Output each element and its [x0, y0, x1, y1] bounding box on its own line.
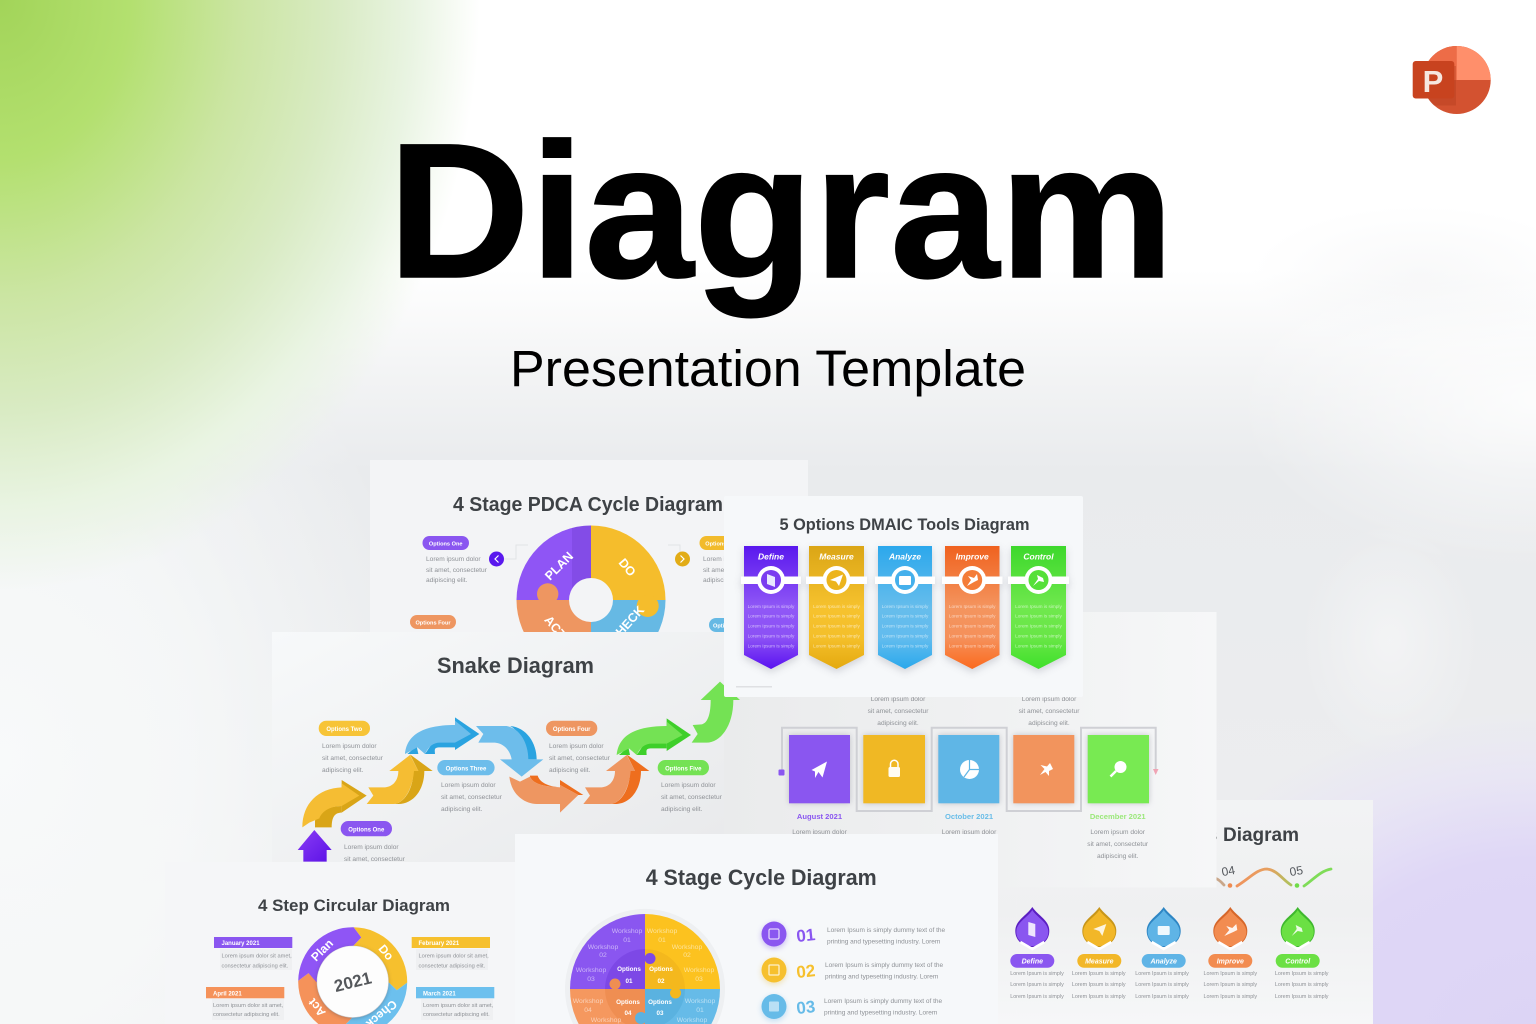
tile: September — [863, 696, 929, 803]
wheel labels: 02 — [599, 952, 607, 959]
list item 02: printing and typesetting industry. Lorem — [825, 974, 938, 980]
label: Options One: adipiscing elit. — [426, 577, 468, 584]
panel: 4 Step Circular Diagram — [165, 862, 517, 1024]
list item 03 — [762, 994, 943, 1019]
label: March 2021: March 2021 — [423, 992, 456, 998]
step: Define: Lorem Ipsum is simply — [1010, 994, 1064, 1000]
label: Options One: Lorem ipsum dolor — [344, 844, 399, 851]
PDCA puzzle wheel — [516, 526, 666, 674]
step: Control: Lorem Ipsum is simply — [1275, 994, 1329, 1000]
step: Improve: Lorem Ipsum is simply — [1203, 982, 1257, 988]
label: Options Three: Options Three — [446, 766, 487, 772]
list item 03: printing and typesetting industry. Lorem — [824, 1010, 937, 1016]
label: March 2021: consectetur adipiscing elit. — [423, 1012, 490, 1018]
banner: Analyze: Lorem Ipsum is simply — [882, 604, 929, 609]
step: Measure — [1072, 907, 1126, 1000]
panel: Snake Diagram — [272, 632, 740, 867]
connector line — [782, 728, 1156, 811]
wheel center labels: Options — [616, 999, 640, 1006]
heading: Snake: Snake Diagram — [437, 653, 594, 678]
banner: Analyze: Lorem Ipsum is simply — [882, 624, 929, 628]
label: Options Two: Lorem ipsum dolor — [322, 743, 377, 750]
label: March 2021 — [416, 987, 494, 1020]
banner: Measure: Measure — [819, 552, 854, 562]
tile: August 2021: Lorem ipsum dolor — [792, 829, 848, 836]
label: February 2021: consectetur adipiscing elit. — [418, 964, 486, 970]
icon: PowerPoint logo: P — [1423, 64, 1443, 99]
banner: Control: Lorem Ipsum is simply — [1015, 614, 1062, 618]
panel: 4 Stage PDCA Cycle Diagram — [370, 460, 808, 674]
footer mark — [736, 686, 772, 688]
label: Options Four: adipiscing elit. — [549, 767, 591, 774]
banner: Define: Lorem Ipsum is simply — [748, 644, 795, 648]
label: Options Two: sit amet, consectetur — [703, 567, 765, 574]
step: Define: Lorem Ipsum is simply — [1010, 982, 1064, 988]
heading: circular: 4 Step Circular Diagram — [258, 896, 450, 915]
tile: September: sit amet, consectetur — [868, 708, 929, 715]
label: Options Two: sit amet, consectetur — [322, 755, 384, 762]
label: April 2021 — [206, 987, 284, 1020]
start marker — [778, 770, 784, 776]
wheel center labels: 01 — [625, 978, 633, 985]
list item 01: Lorem Ipsum is simply dummy text of the — [827, 927, 946, 934]
arrow button left — [489, 552, 504, 566]
ring label: Act: Act — [305, 996, 329, 1019]
label: Options Two: Options Two — [705, 541, 739, 547]
step: Analyze: Lorem Ipsum is simply — [1135, 994, 1189, 1000]
tile: December 2021 — [1087, 735, 1149, 860]
PDCA puzzle wheel: DO — [616, 556, 639, 579]
banner: Define: Lorem Ipsum is simply — [748, 634, 795, 638]
label: Options One — [422, 536, 488, 584]
label: Options Three: adipiscing elit. — [441, 806, 483, 813]
tile: December 2021: Lorem ipsum dolor — [1090, 829, 1146, 836]
banner: Analyze: Analyze — [888, 552, 921, 562]
panel: 4 Stage Cycle Diagram — [515, 834, 998, 1024]
panel: 5 Options DMAIC Tools Diagram — [724, 496, 1083, 697]
banner: Analyze — [875, 546, 935, 669]
wheel center labels: Options — [648, 999, 672, 1006]
arrow: yellow first — [302, 780, 367, 827]
wheel labels: Workshop — [685, 998, 715, 1005]
wheel labels: Workshop — [576, 967, 606, 974]
wheel labels: 01 — [658, 937, 666, 944]
title: Diagram — [388, 103, 1174, 318]
arrow: blue second — [476, 726, 543, 777]
heading: steps diagram: Steps Diagram — [1166, 825, 1299, 846]
ring label: Do: Do — [376, 942, 397, 963]
label: April 2021: April 2021 — [213, 992, 242, 998]
label: Options One: Lorem ipsum dolor — [426, 556, 481, 563]
step: Control — [1275, 907, 1329, 1000]
arrow: orange second — [583, 754, 649, 804]
list item 02: 02 — [795, 961, 816, 982]
label: Options Three: Lorem ipsum dolor — [441, 782, 496, 789]
banner: Improve: Lorem Ipsum is simply — [949, 614, 996, 618]
tile: September: Lorem ipsum dolor — [871, 696, 926, 703]
end arrow — [1153, 769, 1158, 775]
label: Options Two — [319, 721, 384, 774]
label: January 2021: Lorem ipsum dolor sit amet, — [222, 954, 292, 960]
tile: November — [1013, 696, 1080, 803]
wheel labels: 01 — [623, 937, 631, 944]
label: January 2021 — [214, 937, 292, 970]
wheel center labels: 04 — [624, 1010, 632, 1017]
step: Control: Lorem Ipsum is simply — [1275, 982, 1329, 988]
label: March 2021: Lorem ipsum dolor sit amet, — [423, 1003, 494, 1009]
marker: 05: 05 — [1289, 863, 1304, 879]
heading: DMAIC: 5 Options DMAIC Tools Diagram — [780, 515, 1030, 534]
label: February 2021: Lorem ipsum dolor sit amet, — [418, 954, 489, 960]
banner: Define: Define — [758, 552, 784, 562]
marker: 04: 04 — [1221, 863, 1236, 879]
label: Options Two: adipiscing elit. — [322, 767, 364, 774]
step: Analyze: Lorem Ipsum is simply — [1135, 971, 1189, 977]
banner: Analyze: Lorem Ipsum is simply — [882, 634, 929, 638]
banner: Improve: Lorem Ipsum is simply — [949, 624, 996, 628]
wheel labels: Workshop — [612, 928, 642, 935]
arrow button right — [675, 552, 690, 566]
label: February 2021: February 2021 — [418, 941, 460, 947]
label: Options Four — [410, 615, 456, 629]
label: Options Four — [546, 721, 611, 774]
step: Measure: Lorem Ipsum is simply — [1072, 982, 1126, 988]
step: Measure: Lorem Ipsum is simply — [1072, 971, 1126, 977]
wave line — [1215, 869, 1331, 886]
banner: Improve — [942, 546, 1002, 669]
tile: September: adipiscing elit. — [877, 720, 919, 727]
banner: Control: Lorem Ipsum is simply — [1015, 634, 1062, 638]
wheel labels: Workshop — [591, 1017, 621, 1024]
step: Analyze: Analyze — [1149, 958, 1177, 966]
wheel center labels — [616, 966, 673, 1017]
label: January 2021: consectetur adipiscing elit. — [222, 964, 289, 970]
list item 02 — [762, 958, 944, 982]
label: Options Two — [700, 536, 765, 584]
wheel labels: 01 — [696, 1007, 704, 1014]
wheel labels — [573, 928, 715, 1024]
label: Options Five — [658, 760, 723, 813]
list item 03: 03 — [795, 997, 816, 1018]
banner: Control: Lorem Ipsum is simply — [1015, 624, 1062, 628]
label: Options Three: sit amet, consectetur — [441, 794, 503, 801]
step: Control: Lorem Ipsum is simply — [1275, 971, 1329, 977]
icon: PowerPoint logo — [1413, 46, 1491, 114]
label: Options Five: Lorem ipsum dolor — [661, 782, 716, 789]
wheel labels: 03 — [695, 976, 703, 983]
label: Options One: Options One — [429, 541, 462, 547]
banner: Define: Lorem Ipsum is simply — [748, 614, 795, 618]
arrow: orange first — [509, 776, 583, 813]
wheel labels: Workshop — [677, 1017, 707, 1024]
step: Control: Control — [1285, 958, 1311, 966]
arrow: green second — [692, 682, 740, 743]
banner: Improve: Improve — [956, 552, 989, 562]
list item 02: Lorem Ipsum is simply dummy text of the — [825, 962, 944, 969]
step: Analyze — [1135, 907, 1189, 1000]
panel: right steps diagram — [990, 800, 1373, 1024]
tile: October 2021: October 2021 — [945, 812, 994, 821]
label: Options One: sit amet, consectetur — [426, 567, 488, 574]
banner: Measure — [806, 546, 867, 669]
tile: November: adipiscing elit. — [1028, 720, 1070, 727]
tile: October 2021: Lorem ipsum dolor — [942, 829, 997, 836]
heading: PDCA: 4 Stage PDCA Cycle Diagram — [453, 494, 723, 516]
step: Define — [1010, 907, 1064, 1000]
banner: Define — [741, 546, 801, 669]
label: April 2021: consectetur adipiscing elit. — [213, 1012, 280, 1018]
wheel labels: Workshop — [647, 928, 677, 935]
step: Improve: Lorem Ipsum is simply — [1203, 994, 1257, 1000]
wheel center labels: Options — [617, 966, 641, 973]
banner: Measure: Lorem Ipsum is simply — [813, 634, 860, 638]
label: Options Two: Options Two — [326, 727, 363, 733]
banner: Control: Lorem Ipsum is simply — [1015, 604, 1062, 609]
wheel labels: 03 — [587, 976, 595, 983]
arrow: purple start — [298, 830, 332, 862]
label: Options Four: Options Four — [553, 727, 591, 733]
step: Define: Lorem Ipsum is simply — [1010, 971, 1064, 977]
step: Improve: Improve — [1217, 958, 1244, 966]
label: Options Five: sit amet, consectetur — [661, 794, 723, 801]
wheel center labels: Options — [649, 966, 673, 973]
heading: cycle: 4 Stage Cycle Diagram — [646, 865, 877, 890]
banner: Measure: Lorem Ipsum is simply — [813, 604, 860, 609]
marker: 04 — [1221, 863, 1236, 888]
step: Measure: Lorem Ipsum is simply — [1072, 994, 1126, 1000]
list item 01: 01 — [795, 925, 816, 946]
connectors — [503, 545, 680, 559]
wheel center labels: 03 — [656, 1010, 664, 1017]
circular arrow ring: 2021 — [332, 968, 373, 996]
arrow: green first — [617, 718, 691, 755]
banner: Measure: Lorem Ipsum is simply — [813, 644, 860, 648]
wheel labels: Workshop — [588, 944, 618, 951]
tile: October 2021 — [938, 735, 999, 836]
label: Options Five: Options Five — [665, 766, 702, 772]
tile: November: sit amet, consectetur — [1019, 708, 1080, 715]
label: Options Four: Lorem ipsum dolor — [549, 743, 604, 750]
label: Options Four: sit amet, consectetur — [549, 755, 611, 762]
label: Options One: Options One — [348, 827, 385, 833]
label: Options Two: Lorem ipsum dolor — [703, 556, 758, 563]
ring label: Plan: Plan — [308, 936, 336, 964]
wheel center labels: 02 — [657, 978, 665, 985]
step: Analyze: Lorem Ipsum is simply — [1135, 982, 1189, 988]
wheel labels: 04 — [584, 1007, 592, 1014]
PDCA puzzle wheel: ACT — [541, 613, 569, 642]
tile: November: Lorem ipsum dolor — [1022, 696, 1077, 703]
tile: August 2021: August 2021 — [797, 812, 843, 821]
arrow: blue first — [405, 717, 479, 754]
snake arrows — [298, 682, 740, 862]
banner: Analyze: Lorem Ipsum is simply — [882, 644, 929, 648]
label: Options Five: adipiscing elit. — [661, 806, 703, 813]
banner: Measure: Lorem Ipsum is simply — [813, 614, 860, 618]
banner: Define: Lorem Ipsum is simply — [748, 624, 795, 628]
banner: Measure: Lorem Ipsum is simply — [813, 624, 860, 628]
banner: Improve: Lorem Ipsum is simply — [949, 644, 996, 648]
step: Measure: Measure — [1085, 958, 1114, 966]
list item 03: Lorem Ipsum is simply dummy text of the — [824, 998, 943, 1005]
label: Options One: sit amet, consectetur — [344, 856, 406, 863]
label: Options Three — [437, 760, 503, 813]
banner: Control: Control — [1023, 552, 1054, 562]
list item 01 — [762, 922, 946, 946]
banner: Improve: Lorem Ipsum is simply — [949, 634, 996, 638]
banner: Define: Lorem Ipsum is simply — [748, 604, 795, 609]
arrow: yellow second — [367, 754, 433, 804]
list item 01: printing and typesetting industry. Lorem — [827, 938, 940, 946]
label: April 2021: Lorem ipsum dolor sit amet, — [213, 1003, 284, 1009]
label: Options Two: adipiscing elit. — [703, 577, 745, 584]
step: Improve: Lorem Ipsum is simply — [1203, 971, 1257, 977]
tile: December 2021: adipiscing elit. — [1097, 853, 1139, 860]
label: February 2021 — [412, 937, 490, 970]
tile: December 2021: December 2021 — [1090, 812, 1146, 821]
marker: 05 — [1289, 863, 1304, 888]
subtitle: Presentation Template — [510, 340, 1026, 397]
circular arrow ring — [298, 927, 407, 1024]
tile: August 2021 — [789, 735, 850, 836]
PDCA puzzle wheel: CHECK — [607, 603, 647, 646]
wheel labels: 02 — [683, 952, 691, 959]
banner: Analyze: Lorem Ipsum is simply — [882, 614, 929, 618]
wheel labels: Workshop — [672, 944, 702, 951]
label: Options Four: Options Four — [415, 620, 451, 626]
step: Define: Define — [1022, 958, 1043, 966]
banner: Control: Lorem Ipsum is simply — [1015, 644, 1062, 648]
panel: timeline diagram — [724, 612, 1216, 888]
banner: Improve: Lorem Ipsum is simply — [949, 604, 996, 609]
label: Options One — [341, 821, 406, 863]
PDCA puzzle wheel: PLAN — [542, 549, 576, 583]
tile: December 2021: sit amet, consectetur — [1087, 841, 1149, 848]
banner: Control — [1008, 546, 1069, 669]
wheel labels: Workshop — [684, 967, 714, 974]
puzzle wheel — [565, 909, 725, 1024]
label: Options Three — [709, 618, 755, 632]
wheel labels: Workshop — [573, 998, 603, 1005]
label: January 2021: January 2021 — [222, 941, 260, 947]
step: Improve — [1203, 907, 1257, 1000]
label: Options Three: Options Three — [713, 623, 751, 629]
